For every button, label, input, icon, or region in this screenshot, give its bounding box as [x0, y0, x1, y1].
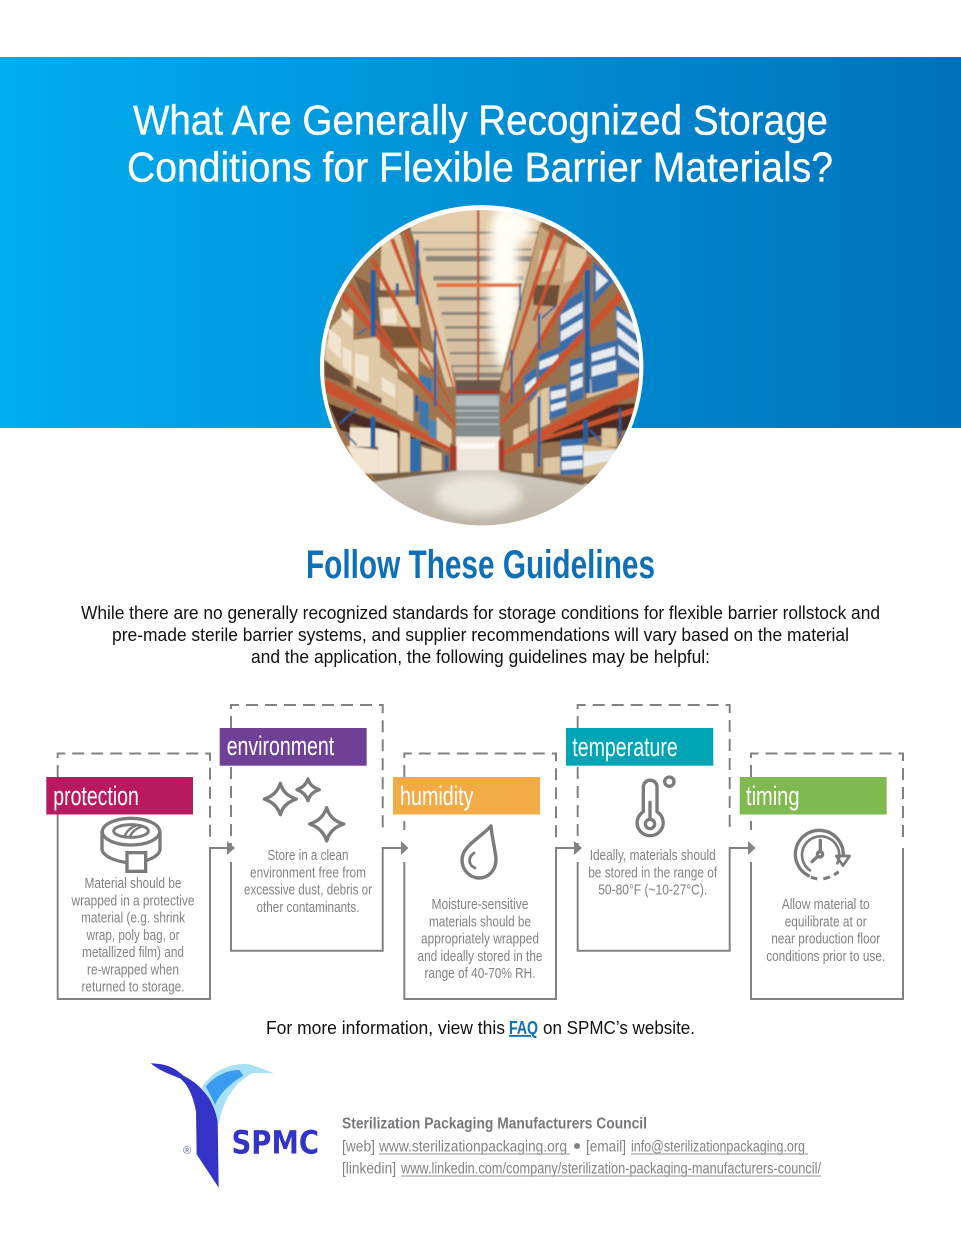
text: temperature	[588, 847, 718, 898]
intro paragraph	[81, 602, 880, 667]
more information line: on SPMC’s website.	[543, 1017, 695, 1038]
footer contact text: [web]	[342, 1138, 375, 1156]
text: timing: conditions prior to use.	[766, 948, 885, 965]
text: humidity: appropriately wrapped	[421, 930, 539, 948]
text: protection: wrap, poly bag, or	[86, 927, 180, 944]
footer contact text: www.sterilizationpackaging.org	[378, 1138, 567, 1156]
more information line: For more information, view this	[266, 1017, 505, 1038]
panel: protection: protection	[53, 781, 139, 811]
back wall	[455, 380, 500, 395]
panel: timing	[740, 754, 903, 999]
text: protection: Material should be	[84, 875, 182, 892]
warehouse photo	[320, 203, 647, 530]
text: environment: Store in a clean	[268, 847, 348, 864]
text: timing: near production floor	[771, 930, 880, 948]
left rack base	[323, 230, 456, 481]
text: environment: excessive dust, debris or	[244, 882, 372, 898]
footer contact text	[342, 1116, 822, 1178]
text: temperature: Ideally, materials should	[590, 847, 716, 864]
text: humidity: range of 40-70% RH.	[424, 965, 536, 982]
intro paragraph: While there are no generally recognized standards for storage conditions for flexible barrier rollstock and	[81, 602, 880, 623]
text: protection: wrapped in a protective	[71, 892, 194, 910]
icon: clock with arrow	[795, 830, 850, 879]
text: environment	[244, 847, 372, 916]
text: temperature: 50-80°F (~10-27°C).	[598, 882, 707, 898]
text: environment: other contaminants.	[256, 899, 360, 916]
text: protection: re-wrapped when	[87, 962, 179, 978]
left rack beams	[324, 230, 456, 454]
title	[127, 96, 833, 190]
icon: tape roll	[102, 818, 160, 871]
text: timing	[766, 896, 885, 965]
more information line: FAQ	[509, 1018, 538, 1038]
footer contact text: Sterilization Packaging Manufacturers Council	[342, 1116, 647, 1132]
text: protection: metallized film) and	[82, 944, 184, 961]
footer contact text: www.linkedin.com/company/sterilization-packaging-manufacturers-council/	[400, 1160, 822, 1178]
intro paragraph: pre-made sterile barrier systems, and supplier recommendations will vary based on the material	[112, 624, 849, 645]
header banner	[0, 57, 961, 428]
more information line	[266, 1017, 695, 1038]
panel: environment	[220, 705, 408, 951]
text: humidity: and ideally stored in the	[418, 948, 542, 965]
text: protection: material (e.g. shrink	[81, 910, 185, 926]
text: environment: environment free from	[250, 864, 366, 882]
panel: timing: timing	[746, 781, 800, 811]
text: timing: equilibrate at or	[785, 914, 867, 930]
logo: SPMC: SPMC	[232, 1124, 319, 1162]
panel: temperature	[566, 705, 756, 951]
logo: SPMC: ®	[183, 1145, 191, 1157]
panel: temperature: temperature	[572, 732, 678, 762]
title: What Are Generally Recognized Storage	[133, 96, 828, 144]
panel: humidity	[393, 754, 582, 999]
right rack boxes	[513, 243, 638, 477]
text: protection: returned to storage.	[82, 978, 184, 996]
panel: protection	[46, 754, 235, 999]
intro paragraph: and the application, the following guidelines may be helpful:	[251, 646, 710, 667]
text: humidity: Moisture-sensitive	[432, 896, 528, 913]
left rack cream boxes	[325, 233, 455, 474]
text: protection	[71, 875, 194, 996]
title: Conditions for Flexible Barrier Materials?	[127, 144, 833, 190]
icon: thermometer	[637, 777, 674, 836]
text: timing: Allow material to	[782, 896, 870, 913]
text: humidity: materials should be	[429, 914, 531, 930]
logo: SPMC	[151, 1063, 319, 1188]
footer contact text: [linkedin]	[342, 1160, 396, 1178]
footer contact text: info@sterilizationpackaging.org	[631, 1138, 805, 1156]
footer contact text: [email]	[586, 1138, 626, 1156]
right rack base	[500, 223, 640, 485]
panel: environment: environment	[227, 731, 335, 761]
floor	[372, 470, 589, 526]
text: temperature: be stored in the range of	[588, 864, 718, 882]
icon: water drop	[462, 826, 496, 878]
heading: follow these guidelines: Follow These Guidelines	[306, 543, 655, 587]
ceiling	[410, 210, 543, 381]
panel: humidity: humidity	[400, 781, 474, 811]
icon: sparkles	[264, 779, 344, 841]
text: humidity	[418, 896, 542, 982]
right rack beams	[500, 227, 639, 455]
